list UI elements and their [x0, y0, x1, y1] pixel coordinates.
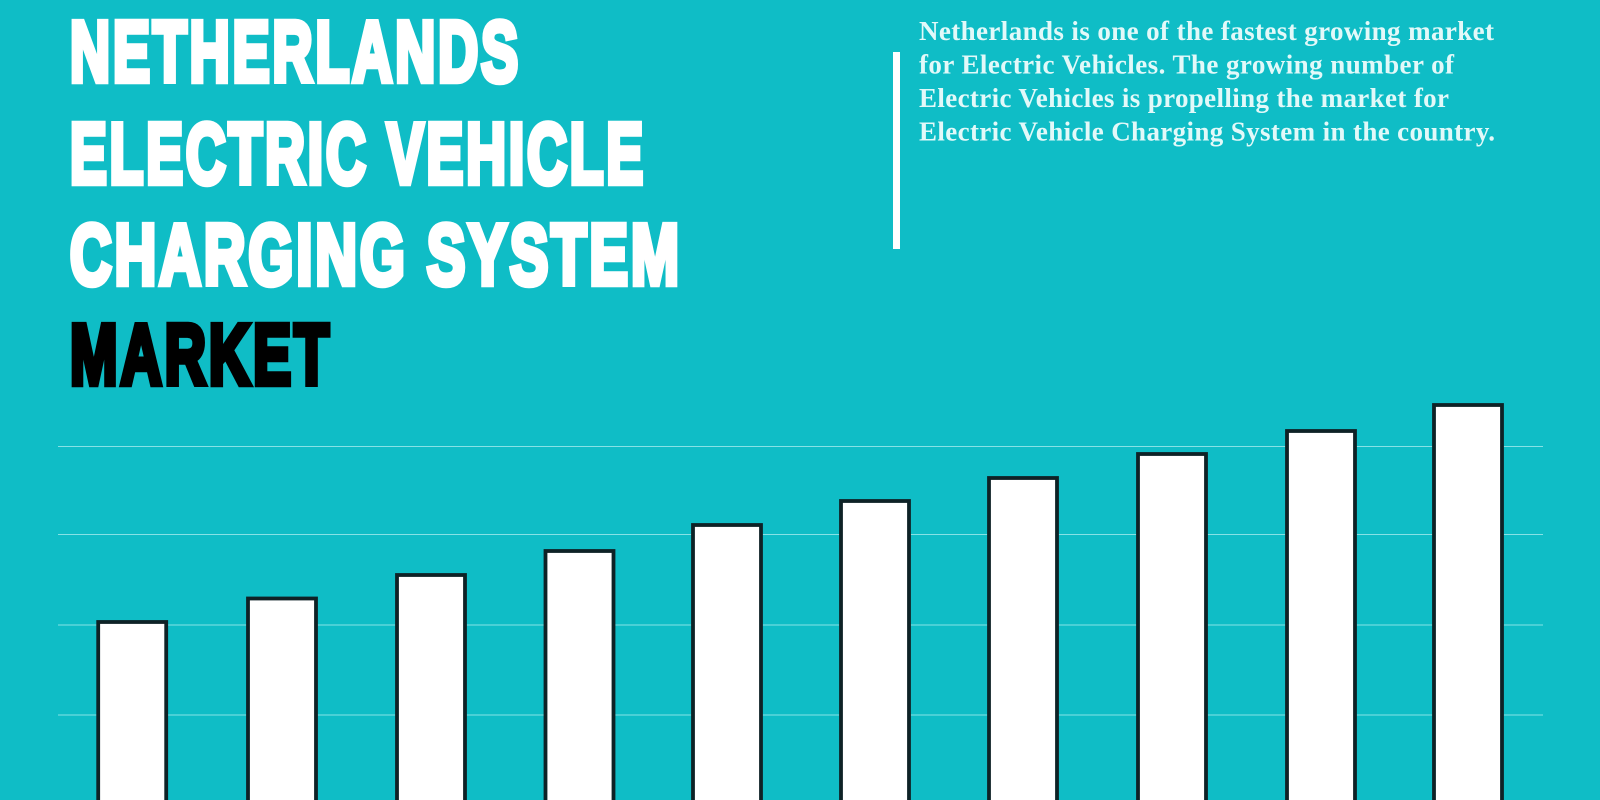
accent bar beside description [893, 52, 900, 249]
title line: Electric Vehicle: ELECTRIC VEHICLE [70, 107, 646, 202]
description text: Netherlands is one of the fastest growing market [919, 16, 1494, 46]
description text [919, 16, 1495, 146]
title line: Market: MARKET [70, 308, 332, 403]
gridlines [58, 446, 1543, 715]
bar chart [58, 405, 1543, 800]
bars [98, 405, 1502, 800]
description text: Electric Vehicles is propelling the market for [919, 83, 1449, 113]
description text: Electric Vehicle Charging System in the country. [919, 116, 1495, 146]
title [70, 5, 682, 403]
description text: for Electric Vehicles. The growing number of [919, 50, 1455, 80]
title line: Netherlands: NETHERLANDS [70, 5, 521, 100]
title line: Charging System: CHARGING SYSTEM [70, 208, 682, 303]
